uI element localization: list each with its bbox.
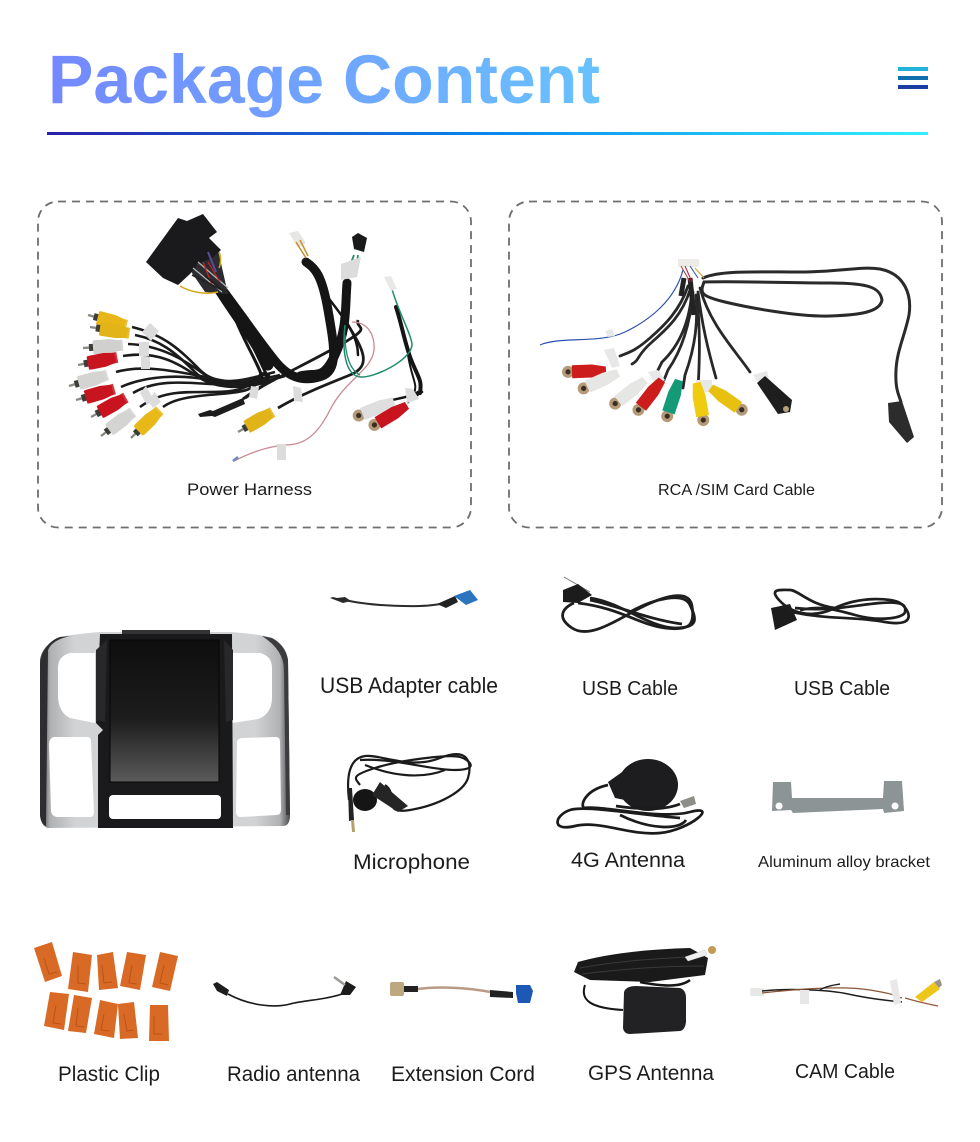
- label: Microphone: [353, 851, 470, 874]
- gps antenna: [574, 946, 716, 1085]
- frame: [40, 632, 290, 828]
- extension cord: [390, 982, 535, 1086]
- title: Package Content: [48, 41, 600, 118]
- white connector with wires: [678, 259, 699, 267]
- cable labels: [139, 257, 419, 460]
- label: USB Adapter cable: [320, 673, 498, 698]
- label: Extension Cord: [391, 1063, 535, 1086]
- usb cable 1: [563, 577, 695, 700]
- label: USB Cable: [582, 678, 678, 700]
- usb cable 2: [771, 590, 909, 700]
- slot: [109, 795, 221, 819]
- label: USB Cable: [794, 678, 890, 700]
- white cable labels: [604, 329, 769, 392]
- label: CAM Cable: [795, 1061, 895, 1083]
- aluminum bracket: [758, 781, 931, 871]
- head unit: [40, 630, 290, 828]
- usb adapter cable: [320, 590, 498, 698]
- microphone: [348, 754, 471, 874]
- label: Aluminum alloy bracket: [758, 854, 931, 871]
- blue wire: [540, 270, 683, 345]
- panel: power harness: [38, 202, 471, 528]
- label: Radio antenna: [227, 1063, 360, 1086]
- screen: [110, 640, 219, 782]
- label: GPS Antenna: [588, 1062, 714, 1085]
- long sim cable: [702, 268, 910, 402]
- centre bezel: [96, 634, 233, 828]
- label: Plastic Clip: [58, 1063, 160, 1086]
- label: power harness: Power Harness: [187, 480, 312, 499]
- fan-out cables: [620, 286, 750, 388]
- thin coloured wires: [233, 285, 412, 461]
- sim module: [888, 401, 914, 443]
- rca plugs: [67, 308, 410, 443]
- label: 4G Antenna: [571, 849, 685, 872]
- rca sockets: [562, 364, 792, 427]
- label: rca sim: RCA /SIM Card Cable: [658, 482, 815, 499]
- cam cable: [750, 979, 942, 1083]
- header rule: [47, 132, 928, 135]
- harness thin cables: [116, 320, 363, 408]
- harness bundle: [220, 262, 422, 402]
- icon: menu: [898, 67, 928, 89]
- panel: rca sim card cable: [509, 202, 942, 528]
- radio antenna: [213, 977, 360, 1086]
- 4g antenna: [558, 759, 702, 872]
- plastic clips: [34, 942, 178, 1086]
- small connectors: [289, 231, 306, 248]
- main connector: [190, 250, 228, 294]
